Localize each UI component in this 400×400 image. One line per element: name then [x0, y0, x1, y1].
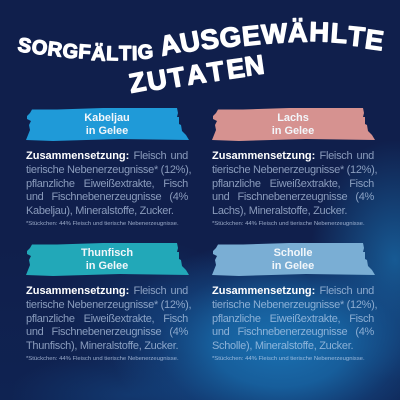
ingredients text: pflanzliche Eiweißextrakte, Fisch	[26, 178, 188, 190]
ingredients text: Zusammensetzung: Fleisch und	[212, 150, 374, 162]
banner title: in Gelee	[86, 260, 128, 272]
ingredients text: und Fischnebenerzeugnisse (4%	[26, 191, 188, 203]
title: AUSGEWÄHLTE	[156, 16, 386, 62]
ingredients text	[212, 150, 377, 226]
ingredients text: *Stückchen: 44% Fleisch und tierische Nebenerzeugnisse.	[26, 356, 179, 362]
panel: Kabeljau	[26, 108, 191, 226]
banner: Kabeljau	[26, 108, 189, 141]
banner title	[272, 112, 314, 136]
ingredients text	[26, 150, 191, 226]
banner title: Kabeljau	[84, 112, 130, 124]
ingredients text	[26, 285, 191, 362]
ingredients text: pflanzliche Eiweißextrakte, Fisch	[212, 312, 374, 324]
ingredients text: tierische Nebenerzeugnisse* (12%),	[212, 299, 377, 311]
panel: Lachs	[212, 108, 377, 226]
banner title: Lachs	[277, 112, 309, 124]
ingredients text: Thunfisch), Mineralstoffe, Zucker.	[26, 340, 178, 352]
ingredients text: und Fischnebenerzeugnisse (4%	[212, 191, 374, 203]
ingredients text: Zusammensetzung: Fleisch und	[26, 150, 188, 162]
panel: Scholle	[212, 243, 377, 362]
title: SORGFÄLTIG	[16, 34, 154, 66]
ingredients text: tierische Nebenerzeugnisse* (12%),	[26, 299, 191, 311]
ingredients text: Kabeljau), Mineralstoffe, Zucker.	[26, 205, 174, 217]
title: ZUTATEN	[126, 50, 266, 99]
ingredients text: *Stückchen: 44% Fleisch und tierische Nebenerzeugnisse.	[212, 220, 365, 226]
ingredients text	[212, 285, 377, 362]
ingredients text: *Stückchen: 44% Fleisch und tierische Nebenerzeugnisse.	[26, 220, 179, 226]
banner: Lachs	[212, 108, 375, 141]
ingredients text: pflanzliche Eiweißextrakte, Fisch	[26, 312, 188, 324]
ingredients text: tierische Nebenerzeugnisse* (12%),	[212, 164, 377, 176]
ingredients text: pflanzliche Eiweißextrakte, Fisch	[212, 178, 374, 190]
banner title	[81, 246, 133, 272]
panel: Thunfisch	[26, 243, 191, 362]
ingredients text: *Stückchen: 44% Fleisch und tierische Nebenerzeugnisse.	[212, 356, 365, 362]
banner title: in Gelee	[86, 124, 128, 136]
ingredients text: und Fischnebenerzeugnisse (4%	[212, 326, 374, 338]
ingredients text: Scholle), Mineralstoffe, Zucker.	[212, 340, 353, 352]
banner title: Thunfisch	[81, 246, 133, 258]
banner title: Scholle	[274, 246, 312, 258]
ingredients text: Zusammensetzung: Fleisch und	[26, 285, 188, 297]
banner title: in Gelee	[272, 260, 314, 272]
ingredients text: Lachs), Mineralstoffe, Zucker.	[212, 205, 347, 217]
banner: Scholle	[212, 243, 375, 276]
banner title	[272, 246, 314, 272]
title	[16, 16, 386, 99]
ingredients text: und Fischnebenerzeugnisse (4%	[26, 326, 188, 338]
ingredients text: tierische Nebenerzeugnisse* (12%),	[26, 164, 191, 176]
banner title: in Gelee	[272, 124, 314, 136]
banner title	[84, 112, 130, 136]
ingredients text: Zusammensetzung: Fleisch und	[212, 285, 374, 297]
banner: Thunfisch	[26, 243, 189, 276]
